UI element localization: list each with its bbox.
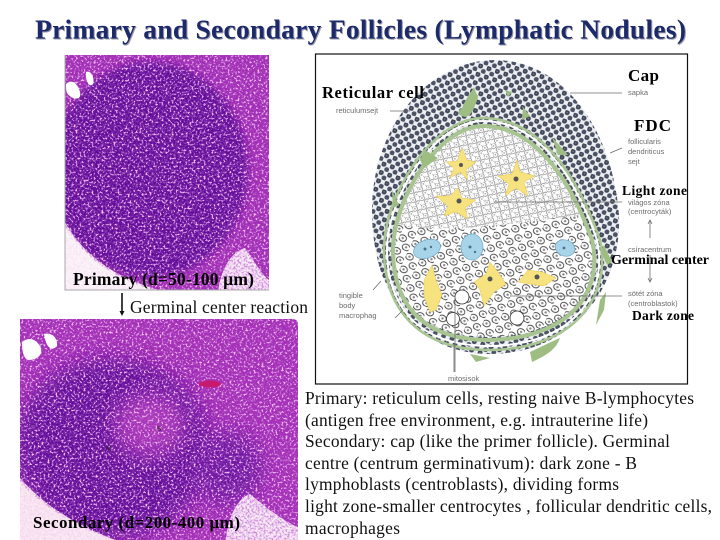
small diagram labels: tingible	[339, 291, 363, 300]
small diagram labels: body	[339, 301, 356, 310]
label: FDC: FDC	[634, 116, 671, 135]
micrograph: primary follicle	[52, 55, 269, 294]
panel: follicle diagram	[316, 54, 688, 384]
micrograph: secondary follicle	[14, 319, 298, 540]
tingible body macrophages	[411, 234, 577, 262]
text block: description: (antigen free environment, e.g. intrauterine life)	[305, 410, 648, 430]
label: germinal center reaction: Germinal center reaction	[130, 297, 308, 317]
small diagram labels: dendriticus	[628, 147, 665, 156]
reticular cells	[392, 87, 612, 362]
text block: description: Primary: reticulum cells, resting naive B-lymphocytes	[305, 388, 694, 408]
small diagram labels: follicularis	[628, 137, 661, 146]
small diagram labels: sejt	[628, 157, 641, 166]
small diagram labels	[336, 88, 678, 383]
small diagram labels: csíracentrum	[628, 245, 671, 254]
small diagram labels: világos zóna	[628, 198, 671, 207]
label: reticular cell: Reticular cell	[322, 83, 424, 102]
text block: description: light zone-smaller centrocytes , follicular dendritic cells,	[305, 496, 712, 516]
leader lines	[373, 93, 652, 372]
small diagram labels: macrophag	[339, 311, 377, 320]
title: Primary and Secondary Follicles (Lymphatic Nodules)	[36, 14, 687, 46]
text block: description: centre (centrum germinativum): dark zone - B	[305, 453, 637, 473]
label: cap: Cap	[628, 66, 659, 85]
label: primary follicle: Primary (d=50-100 µm)	[73, 269, 254, 289]
label: germinal center: Germinal center	[611, 253, 709, 268]
mitosis cells	[446, 290, 524, 326]
text block: description: lymphoblasts (centroblasts), dividing forms	[305, 474, 619, 494]
label: dark zone: Dark zone	[632, 308, 694, 323]
small diagram labels: sapka	[628, 88, 649, 97]
text block: description: macrophages	[305, 518, 400, 538]
text block: description	[305, 388, 712, 538]
small diagram labels: mitosisok	[448, 374, 480, 383]
label: secondary follicle: Secondary (d=200-400 µm)	[33, 513, 240, 532]
micrograph: secondary follicle: v	[106, 442, 112, 454]
small diagram labels: reticulumsejt	[336, 106, 379, 115]
cell mantle cap	[372, 60, 619, 354]
small diagram labels: (centroblastok)	[628, 299, 678, 308]
small diagram labels: sötét zóna	[628, 289, 663, 298]
follicular dendritic cells	[424, 148, 556, 312]
small diagram labels: (centrocyták)	[628, 207, 672, 216]
label: light zone: Light zone	[622, 183, 687, 198]
title: Primary and Secondary Follicles (Lymphatic Nodules)	[35, 14, 686, 44]
text block: description: Secondary: cap (like the primer follicle). Germinal	[305, 431, 670, 451]
micrograph: secondary follicle: s	[157, 422, 161, 434]
germinal center	[380, 118, 610, 350]
arrow: primary to secondary	[120, 293, 124, 316]
